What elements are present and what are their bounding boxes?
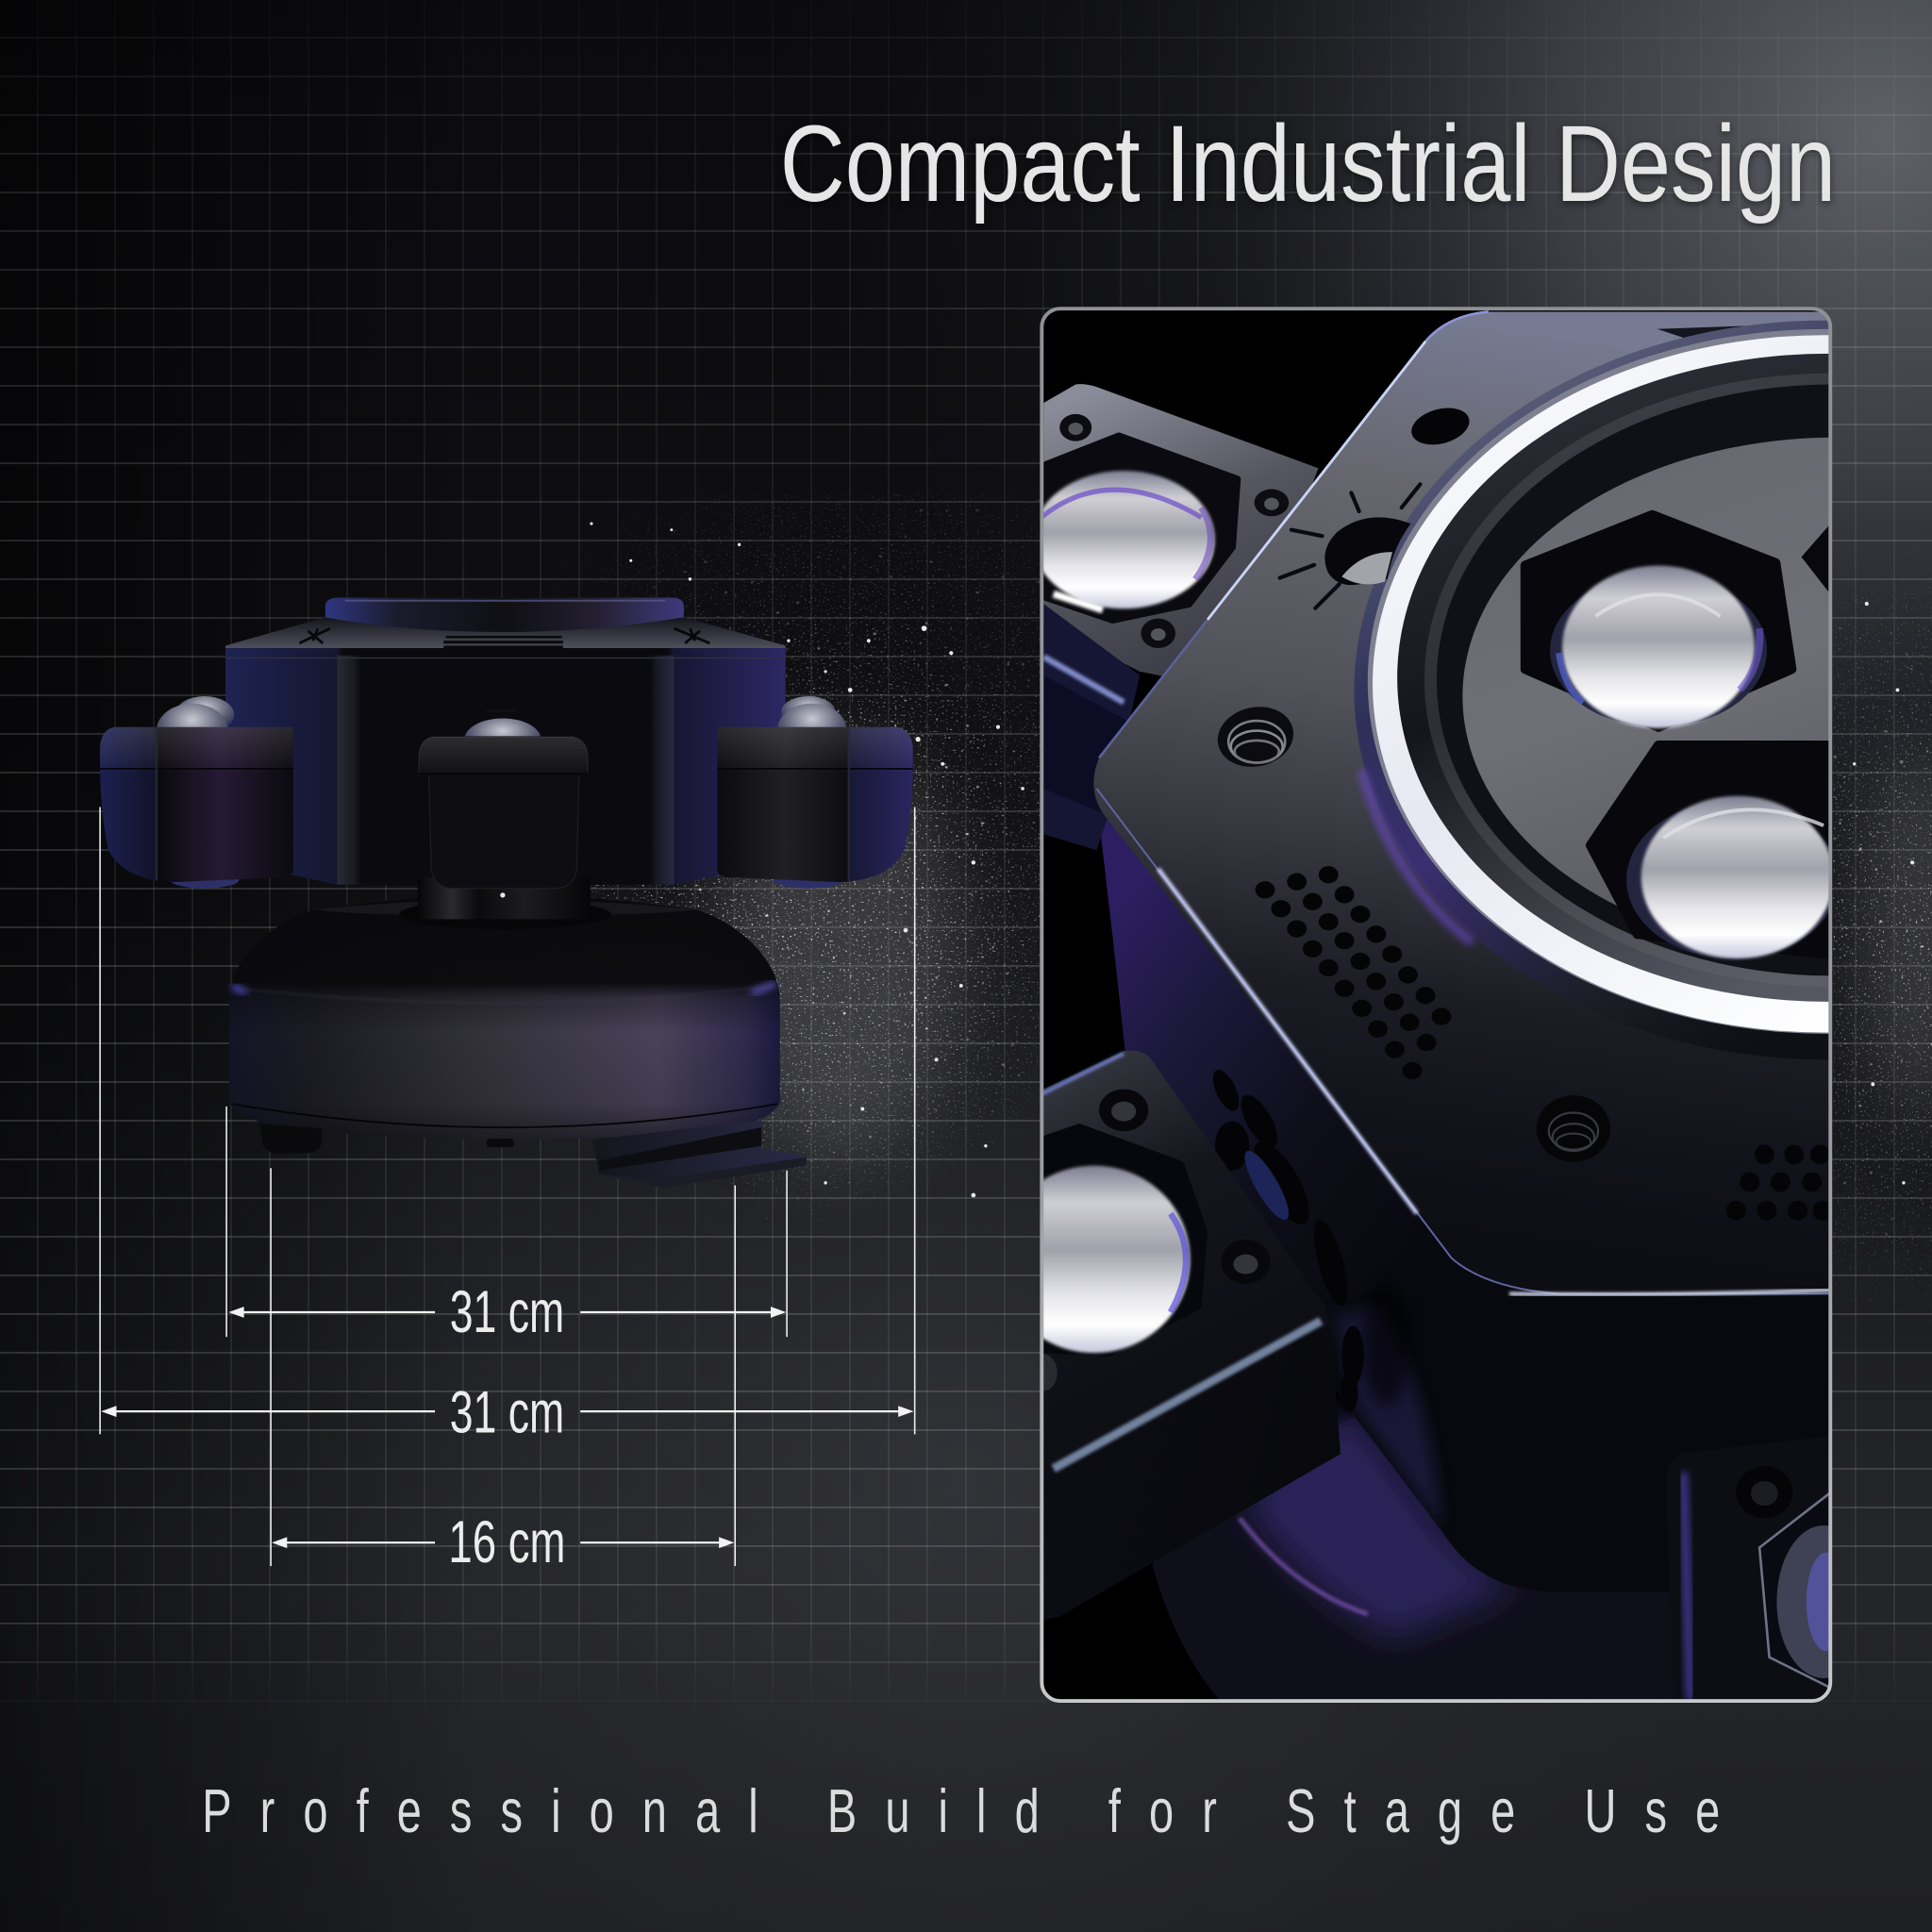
- footer subtitle: Professional Build for Stage Use: [202, 1777, 1720, 1846]
- right head lenses: [781, 696, 836, 728]
- threaded hole lower: [1537, 1095, 1610, 1162]
- dimension: middle 31 cm: [101, 1379, 913, 1445]
- panel: close-up of product: [998, 308, 1932, 1703]
- panel border: [1041, 308, 1830, 1701]
- threaded hole upper: [1212, 700, 1299, 774]
- dimension: 16 cm: [272, 1509, 734, 1575]
- top left light head: [1033, 384, 1319, 850]
- bottom left light head: [998, 1051, 1341, 1621]
- foot: [260, 1124, 322, 1154]
- holes: [1407, 402, 1474, 451]
- left light head: [100, 724, 294, 885]
- mounting bracket: [592, 1120, 807, 1188]
- left head lenses: [175, 696, 234, 733]
- base disc: [1152, 1411, 1675, 1700]
- dimension: middle 31 cm: 31 cm: [450, 1379, 564, 1445]
- dimension: 16 cm: 16 cm: [448, 1509, 566, 1575]
- second lens: [1591, 745, 1839, 958]
- top-right triangle mark: [1657, 325, 1748, 338]
- body side: [1095, 789, 1836, 1592]
- recess: [1397, 354, 1932, 1002]
- vent holes: [1256, 866, 1832, 1221]
- particle dust clouds: [542, 492, 1932, 1368]
- dimension: top 31 cm: 31 cm: [450, 1279, 564, 1345]
- right light head: [716, 724, 914, 885]
- hole with ray marks: [1280, 484, 1420, 608]
- extension lines: [100, 808, 915, 1566]
- bottom right light head: [1666, 1436, 1871, 1703]
- body top surface: [225, 617, 786, 658]
- center lens: [464, 718, 541, 760]
- dimension lines and labels: [100, 808, 915, 1575]
- ring outer rim: [1355, 321, 1828, 1059]
- screws: [1099, 1090, 1148, 1131]
- neck: [418, 877, 591, 919]
- center light head: [419, 737, 588, 889]
- third lens socket: [1802, 518, 1836, 601]
- white light ring: [1373, 335, 1932, 1033]
- vent strip: [443, 636, 563, 648]
- base: [229, 894, 780, 1140]
- lens plate: [1462, 438, 1932, 955]
- top plate: [325, 597, 684, 632]
- screws: [1059, 414, 1091, 441]
- dimension: top 31 cm: [228, 1279, 786, 1345]
- silver rim: [1368, 328, 1828, 1034]
- marks: [299, 628, 330, 643]
- main lens: [1525, 515, 1791, 728]
- gear teeth: [1208, 1066, 1364, 1412]
- main top surface: [1093, 311, 1836, 1291]
- body sides and front: [225, 648, 786, 885]
- product front view: [100, 597, 914, 1188]
